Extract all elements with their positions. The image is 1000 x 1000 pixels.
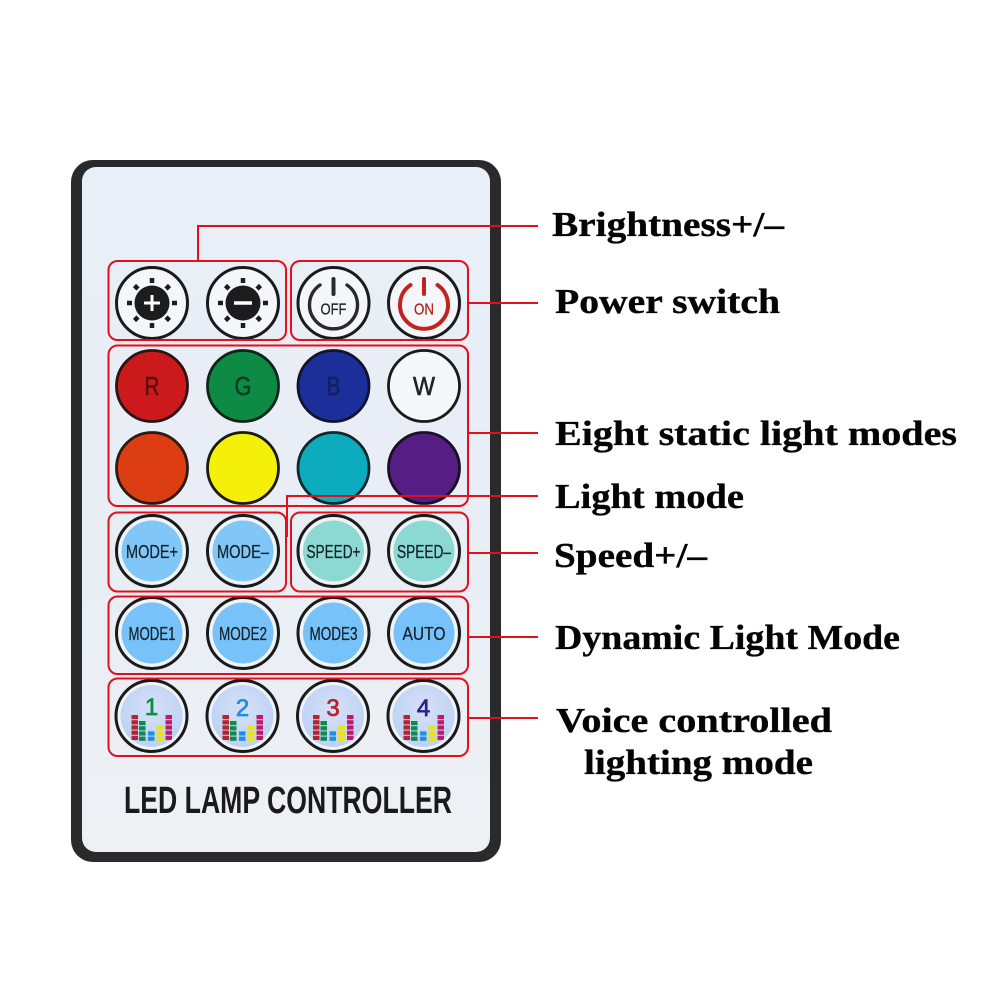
button: voice 2 [207, 680, 278, 752]
button: purple [388, 432, 460, 504]
label: voice controlled lighting mode [556, 701, 833, 782]
button: mode plus [116, 516, 188, 586]
leader line: speed [468, 552, 538, 554]
label: light mode: Light mode [555, 477, 744, 516]
button: red R [116, 350, 188, 422]
leader line: dynamic mode [468, 636, 538, 638]
remote caption: LED LAMP CONTROLLER [124, 780, 452, 822]
button: voice 1: 1 [145, 694, 158, 721]
label: eight static light modes: Eight static light modes [555, 414, 957, 453]
leader line: static modes [468, 432, 538, 434]
button: mode 3: MODE3 [310, 624, 358, 644]
button: mode minus: MODE– [217, 542, 269, 562]
button: brightness minus [208, 268, 278, 338]
button: red R: R [144, 371, 160, 401]
button: speed minus [388, 516, 460, 586]
button: mode 1: MODE1 [128, 624, 176, 644]
button: auto [388, 598, 460, 668]
button: mode 2 [208, 598, 278, 668]
button: auto: AUTO [402, 624, 446, 644]
button: power off: OFF [320, 302, 346, 318]
button: power off [298, 268, 369, 338]
label: dynamic light mode: Dynamic Light Mode [555, 618, 900, 657]
label: voice controlled lighting mode: Voice controlled [556, 701, 833, 740]
label: power switch: Power switch [555, 282, 780, 321]
button: white W [388, 350, 460, 422]
button: green G: G [234, 371, 252, 401]
button: mode 3 [298, 598, 369, 668]
button: yellow [208, 432, 278, 504]
button: voice 3: 3 [326, 695, 340, 722]
red group outlines [108, 261, 468, 756]
button: speed minus: SPEED– [397, 542, 451, 562]
button: brightness plus [116, 268, 188, 338]
button: mode 2: MODE2 [219, 624, 267, 644]
button: voice 4 [388, 680, 459, 752]
leader line: power switch [468, 302, 538, 304]
button: white W: W [413, 371, 435, 401]
leader line: light mode [287, 496, 538, 537]
button: mode plus: MODE+ [126, 542, 178, 562]
button: blue B [298, 350, 369, 422]
button: voice 1 [116, 680, 187, 752]
button: mode 1 [116, 598, 188, 668]
button: voice 3 [298, 680, 368, 752]
button: cyan [298, 432, 369, 504]
button: blue B: B [326, 371, 340, 401]
label: speed: Speed+/– [554, 536, 708, 575]
button: speed plus: SPEED+ [306, 542, 360, 562]
button: power on: ON [414, 302, 434, 318]
button: mode minus [208, 516, 278, 586]
button: orange [116, 432, 188, 504]
leader line: voice mode [468, 717, 538, 719]
button: voice 2: 2 [236, 695, 249, 722]
button: power on [388, 268, 460, 338]
label: brightness: Brightness+/– [552, 205, 785, 244]
label: voice controlled lighting mode: lighting mode [584, 743, 813, 782]
button: speed plus [298, 516, 369, 586]
button: voice 4: 4 [417, 695, 430, 722]
remote control body [71, 160, 501, 862]
leader line: brightness [198, 226, 538, 261]
button: green G [208, 350, 278, 422]
